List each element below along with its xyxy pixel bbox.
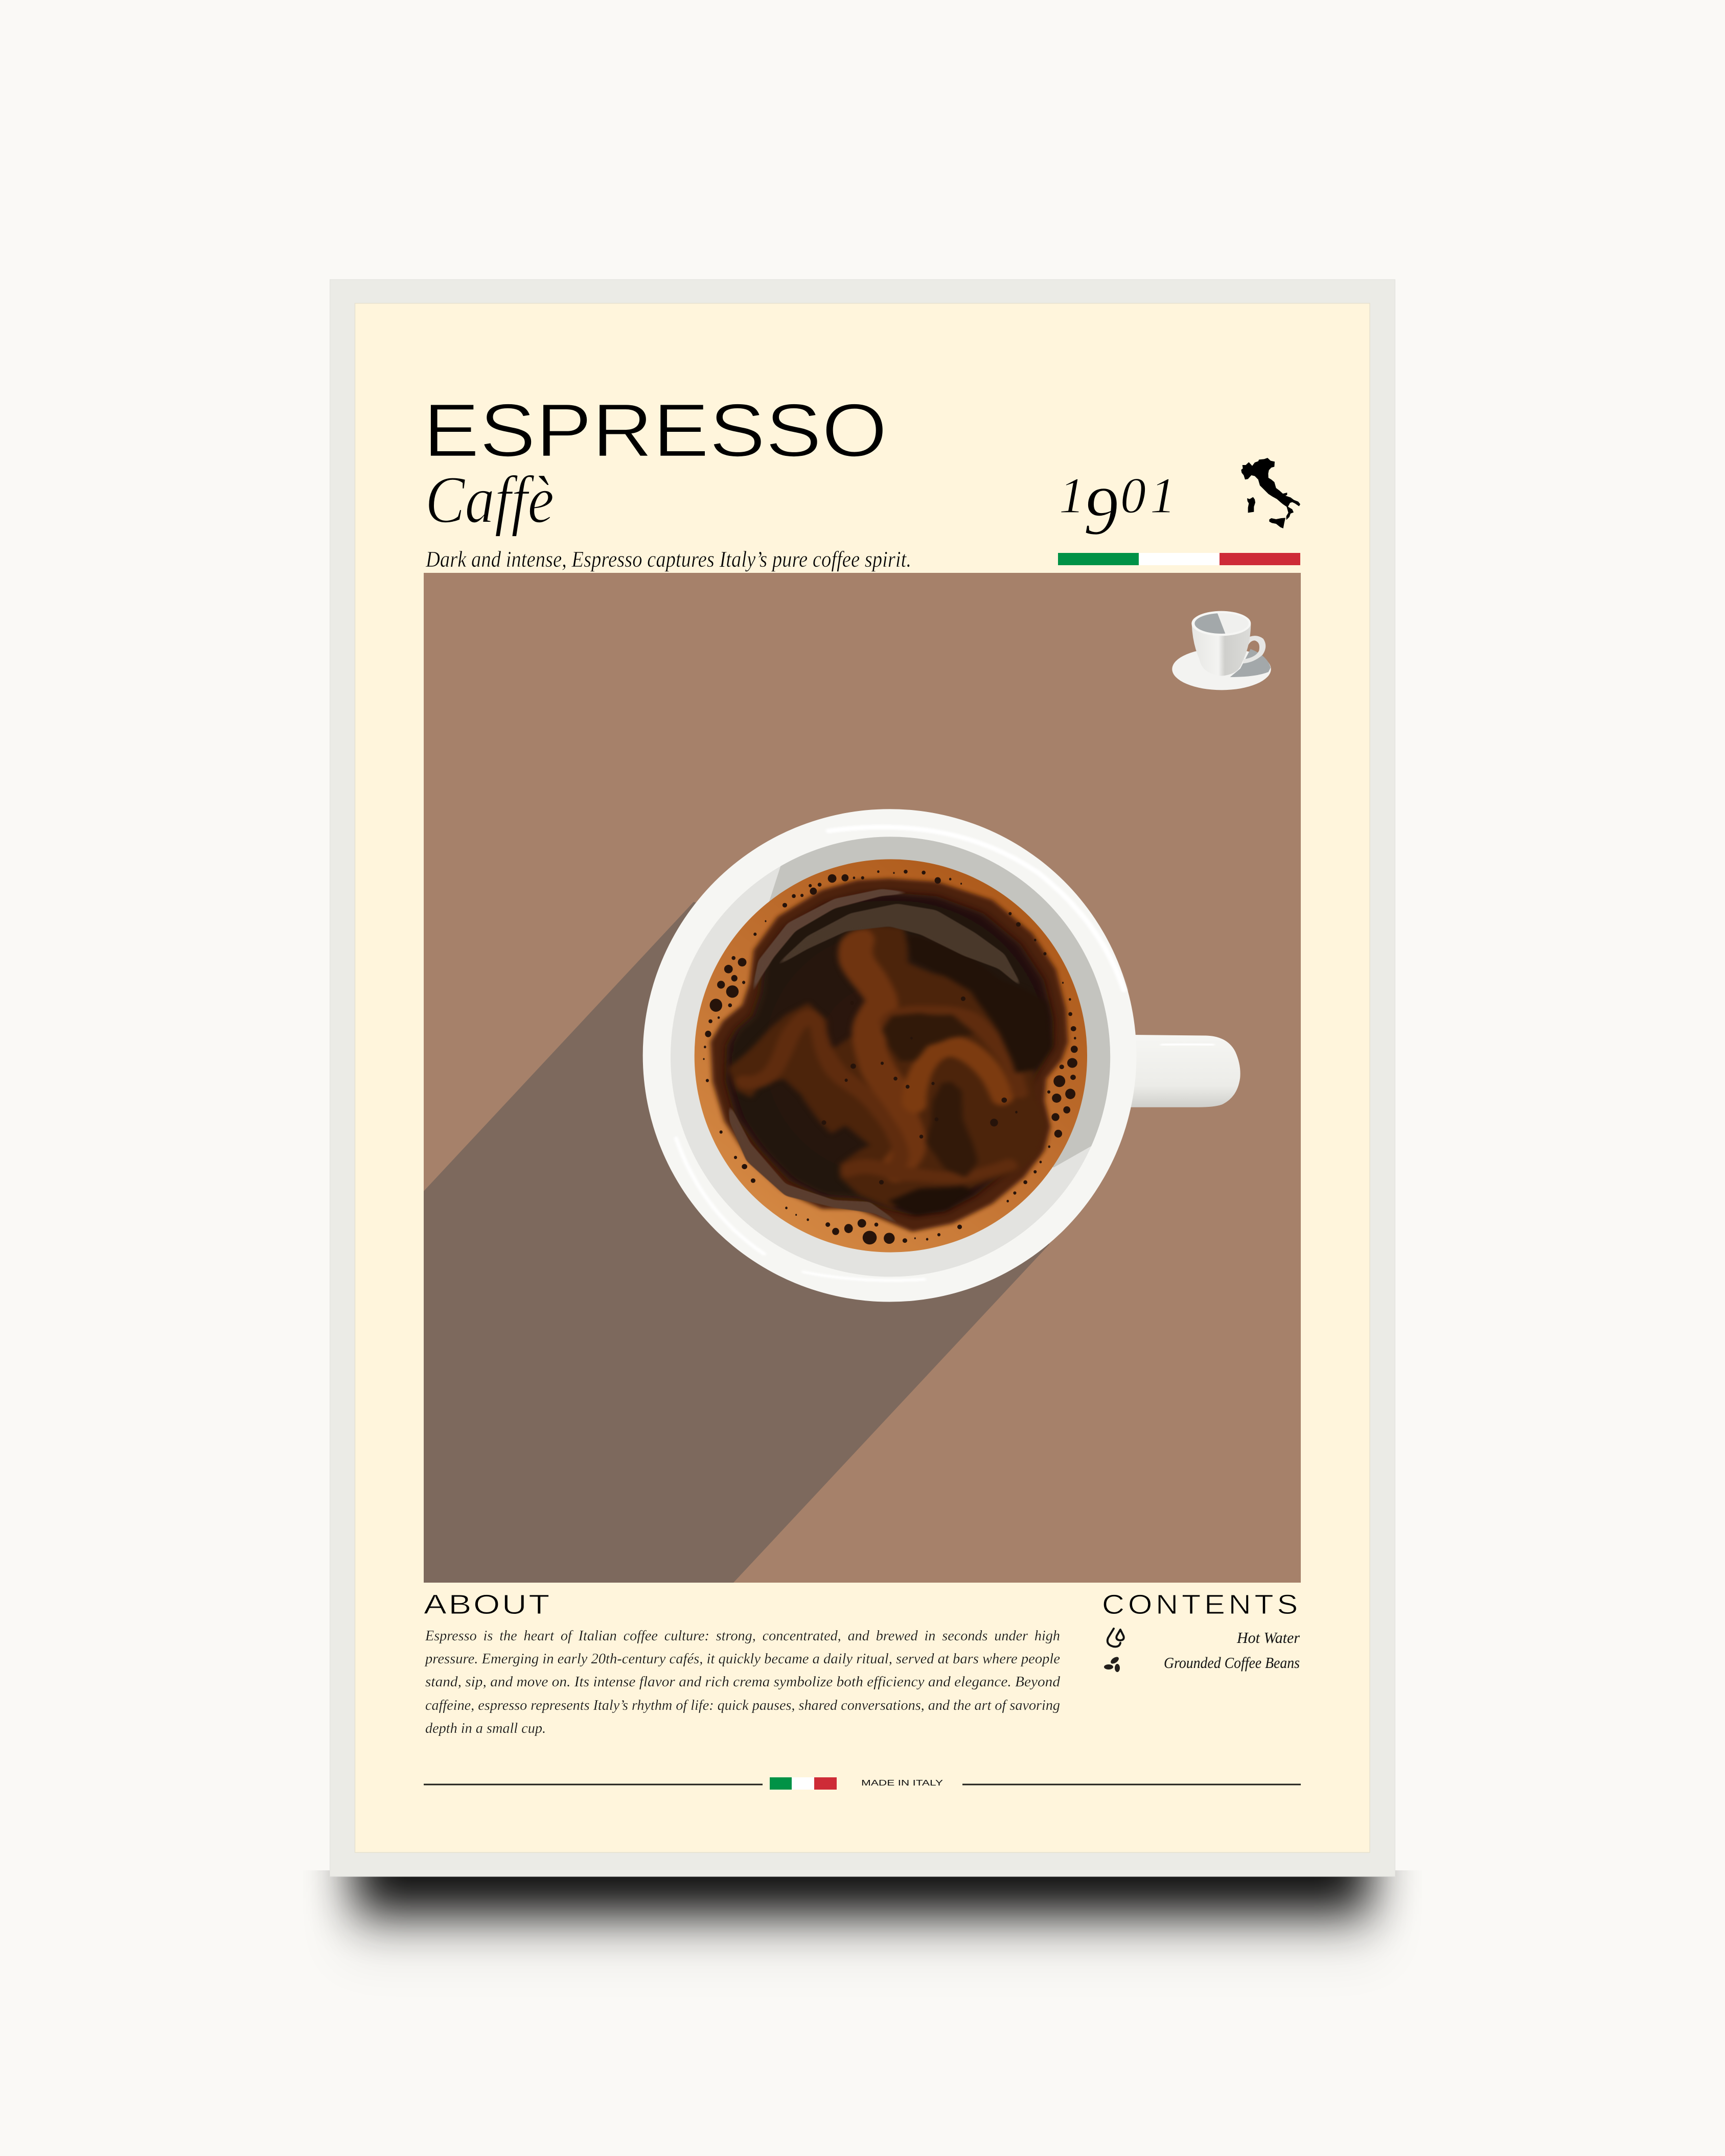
handle highlight [1163, 1044, 1212, 1046]
contents item: Hot Water: Hot Water [1236, 1629, 1300, 1647]
about paragraph: Espresso is the heart of Italian coffee culture: strong, concentrated, and brewed in seconds under high [425, 1628, 1060, 1644]
about paragraph: depth in a small cup. [425, 1720, 546, 1736]
dark coffee body [726, 893, 1053, 1215]
icon: map of Italy [1241, 458, 1300, 528]
tagline: Dark and intense, Espresso captures Italy’s pure coffee spirit. [425, 547, 911, 572]
coffee swirls [729, 928, 1050, 1216]
title: ESPRESSO: ESPRESSO [423, 388, 887, 473]
heading: CONTENTS: CONTENTS [1102, 1589, 1301, 1620]
year: 1901: 9 [1084, 473, 1118, 549]
cup inner wall [671, 837, 1110, 1277]
year: 1901: 1 [1150, 467, 1176, 524]
footer rule right [962, 1783, 1301, 1786]
coffee cup top view [639, 807, 1240, 1302]
cast shadow under frame [314, 1870, 1411, 1963]
footer text: made in Italy: MADE IN ITALY [861, 1779, 943, 1788]
long cup shadow [424, 902, 1049, 1583]
footer flag [770, 1777, 837, 1790]
year: 1901: 1 [1059, 467, 1085, 524]
crema bubbles [703, 870, 1078, 1244]
cup handle [1108, 1035, 1240, 1107]
about paragraph: pressure. Emerging in early 20th-century cafés, it quickly became a daily ritual, served at bars where people [424, 1651, 1060, 1667]
illustration panel [424, 573, 1301, 1583]
about paragraph: caffeine, espresso represents Italy’s rhythm of life: quick pauses, shared conversations, and the art of savoring [425, 1697, 1060, 1713]
poster paper [355, 304, 1370, 1852]
icon: water drops [1108, 1629, 1124, 1647]
subtitle: Caffè: Caffè [425, 462, 554, 537]
year: 1901: 0 [1120, 467, 1146, 524]
crema [695, 859, 1087, 1253]
icon: small cup and saucer [1172, 611, 1271, 690]
icon: coffee beans [1104, 1656, 1120, 1672]
about paragraph: stand, sip, and move on. Its intense flavor and rich crema symbolize both efficiency and elegance. Beyond [425, 1674, 1060, 1690]
coffee glass reflections [724, 889, 1024, 1230]
cup rim [643, 809, 1136, 1302]
footer rule left [424, 1783, 763, 1786]
rim highlights [676, 827, 1124, 1280]
contents item: Grounded Coffee Beans: Grounded Coffee Beans [1164, 1654, 1300, 1672]
Italian flag bar [1058, 553, 1300, 565]
coffee surface [713, 881, 1065, 1230]
picture frame [330, 280, 1395, 1876]
about paragraph [424, 1628, 1060, 1736]
heading: ABOUT: ABOUT [424, 1589, 551, 1620]
